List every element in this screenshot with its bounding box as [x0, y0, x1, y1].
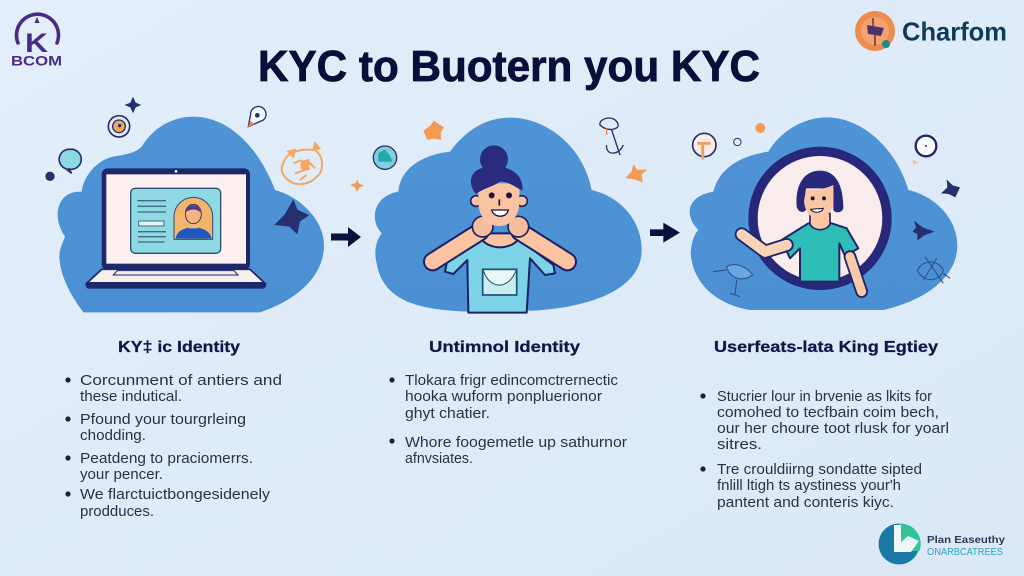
cloud background [690, 117, 957, 310]
bullet list: Stucrier lour in brvenie as lkits for [717, 388, 932, 405]
bullet list: Pfound your tourgrleing [80, 411, 246, 428]
column: unique identity text [389, 339, 627, 467]
cloud background [375, 118, 642, 312]
logo: BCOM: K [25, 28, 49, 58]
icon: small ring [734, 138, 741, 146]
arrow: step 2 to 3 (in panel coords) [650, 223, 680, 243]
icon: pin [248, 107, 266, 127]
icon: small triangle [913, 159, 919, 165]
figure: woman with hands at chin [433, 145, 567, 313]
icon: doodle right [917, 257, 950, 283]
panel: KYC identity illustration [45, 97, 324, 312]
bullet list: our her choure toot rlusk for yoarl [717, 420, 949, 437]
bullet list: hooka wuform ponpluerionor [405, 388, 602, 405]
logo: Plan Easeuthy: Plan Easeuthy [927, 534, 1005, 546]
arrow: step 1 to 2 [331, 227, 361, 247]
bullet list [65, 372, 282, 520]
cloud background [58, 117, 324, 312]
title: KYC to Buotern you KYC [258, 42, 760, 91]
heading: KY‡ ic Identity [118, 339, 240, 356]
icon: ring portal [753, 151, 887, 285]
bullet list: pantent and conteris kiyc. [717, 494, 894, 511]
icon: orange splash [423, 121, 444, 140]
icon: orange sparkle left [350, 179, 364, 192]
logo: Plan Easeuthy: ONARBCATREES [927, 547, 1003, 558]
panel: user identity illustration [690, 117, 960, 310]
bullet list: We flarctuictbongesidenely [80, 486, 271, 503]
icon: clock [916, 136, 936, 156]
heading: Untimnol Identity [429, 339, 580, 356]
bullet list: Whore foogemetle up sathurnor [405, 434, 627, 451]
ID card [131, 188, 221, 253]
logo: Charfom [855, 11, 1007, 51]
logo: Plan Easeuthy [878, 523, 1005, 564]
icon: sparkle [124, 97, 141, 113]
bullet list: Tre crouldiirng sondatte sipted [717, 461, 922, 478]
icon: doodle key [600, 118, 623, 155]
heading: Userfeats-lata King Egtiey [714, 339, 938, 356]
icon: star top [941, 179, 960, 197]
bullet list [700, 388, 949, 511]
icon: doodle left [713, 265, 753, 297]
bullet list [389, 372, 627, 467]
bullet list: afnvsiates. [405, 450, 473, 467]
bullet list: your pencer. [80, 466, 163, 483]
panel: unique identity illustration [350, 118, 680, 313]
icon: dot [45, 172, 55, 181]
icon: orange doodle [282, 143, 322, 184]
bullet list: fnlill ltigh ts aystiness your'h [717, 477, 901, 494]
icon: orange dot [755, 123, 765, 133]
bullet list: sitres. [717, 436, 762, 453]
icon: laptop [86, 168, 266, 289]
bullet list: ghyt chatier. [405, 405, 490, 422]
bullet list: chodding. [80, 427, 146, 444]
bullet list: Peatdeng to praciomerrs. [80, 450, 253, 467]
icon: star lower [913, 221, 935, 241]
column: user identity text [700, 339, 949, 511]
bullet list: prodduces. [80, 503, 154, 520]
column: KYC identity text [65, 339, 282, 520]
figure: waving person [742, 171, 862, 292]
icon: target [108, 116, 130, 137]
icon: star large [274, 199, 309, 234]
icon: tools badge [693, 133, 716, 159]
logo: BCOM: BCOM [11, 53, 62, 69]
bullet list: Corcunment of antiers and [80, 372, 282, 389]
icon: orange sparkle right [625, 164, 647, 183]
logo: BCOM [11, 14, 62, 69]
logo: Charfom: Charfom [902, 16, 1007, 46]
bullet list: these indutical. [80, 388, 182, 405]
bullet list: Tlokara frigr edincomctrernectic [405, 372, 618, 389]
icon: chart badge [373, 146, 397, 169]
bullet list: comohed to tecfbain coim bech, [717, 404, 939, 421]
icon: speech bubble [59, 149, 81, 173]
